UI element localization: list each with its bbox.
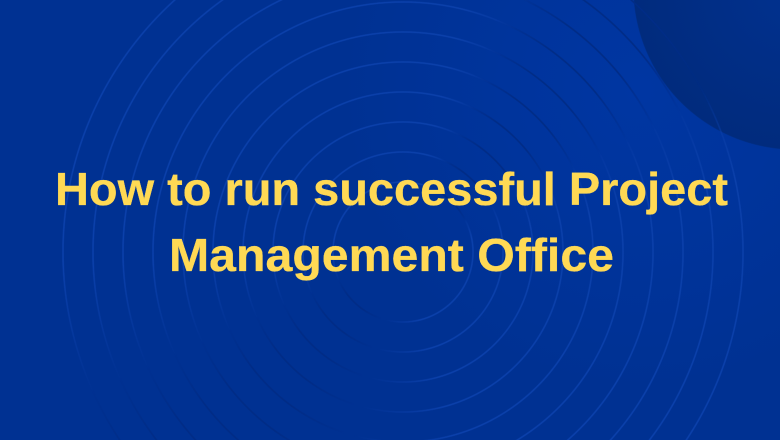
- concentric rings: shaded arcs: [120, 0, 670, 440]
- title: Management Office: [169, 229, 614, 281]
- title: How to run successful Project: [55, 163, 728, 215]
